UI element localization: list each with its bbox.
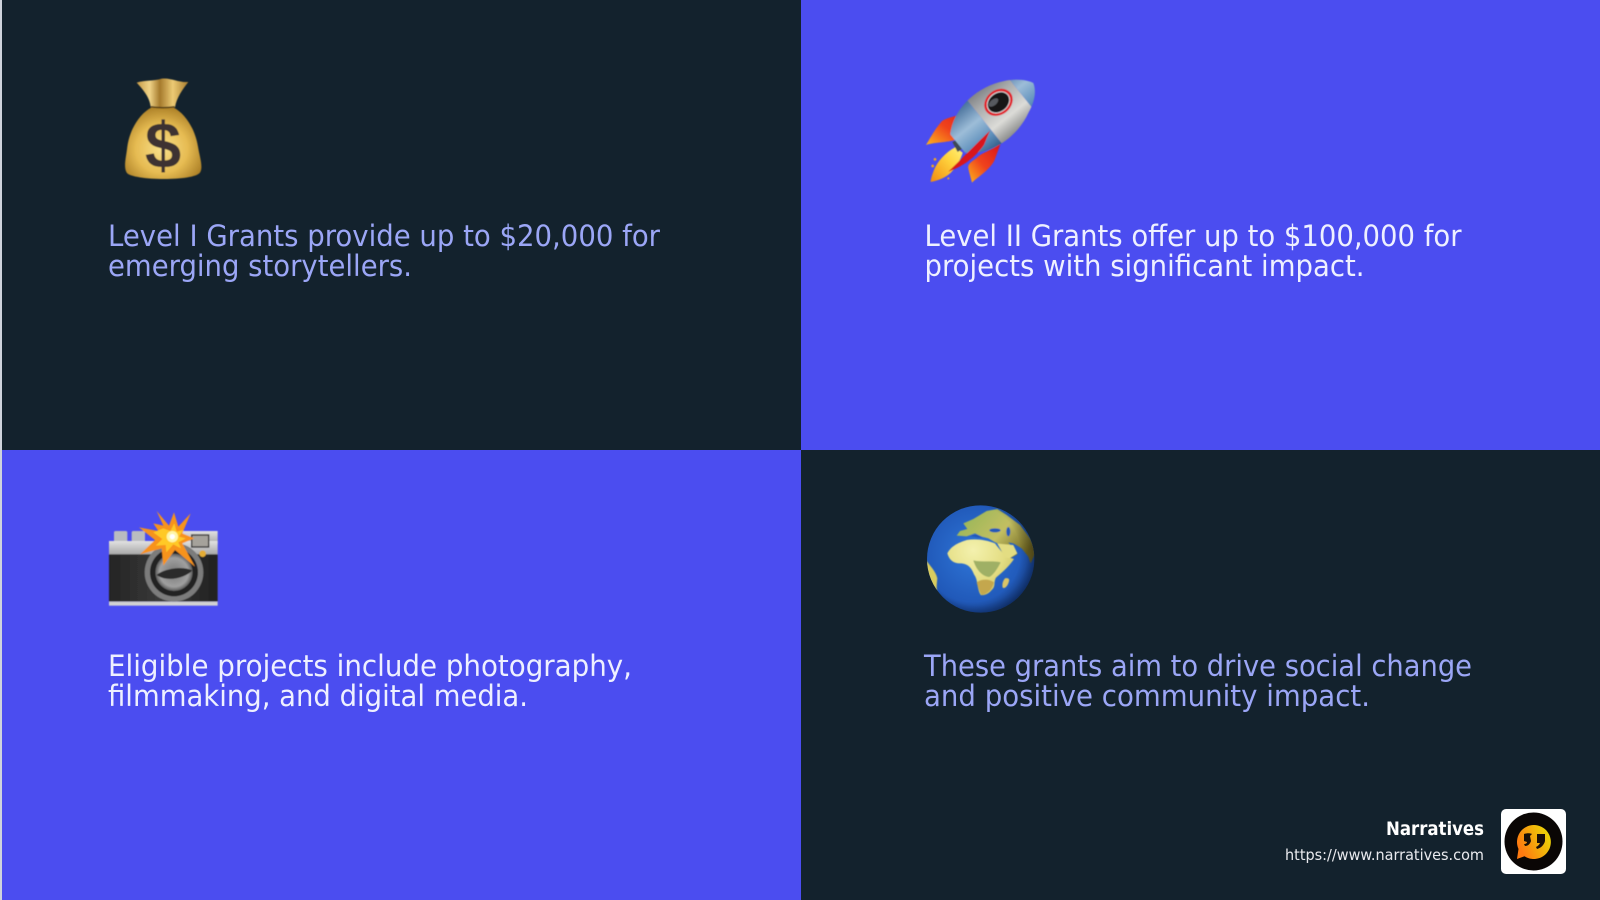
text: Level II: Level II Grants offer up to $100,000 for [924, 219, 1462, 253]
text: eligible: filmmaking, and digital media. [108, 679, 528, 713]
icon: rocket [926, 79, 1036, 183]
icon: money bag: $ [145, 108, 181, 181]
text: Level II: projects with significant impact. [924, 249, 1364, 283]
icon: narratives logo [1501, 809, 1566, 874]
text: social change: and positive community impact. [924, 679, 1370, 713]
text: eligible [108, 649, 632, 713]
text: Level I [108, 219, 661, 283]
text: eligible: Eligible projects include photography, [108, 649, 632, 683]
icon: globe [923, 505, 1036, 613]
brand url: https://www.narratives.com [1285, 846, 1484, 864]
panel: Level II grants [801, 0, 1600, 450]
text: social change [923, 649, 1472, 713]
text: Level I: emerging storytellers. [108, 249, 412, 283]
icon: money bag [125, 78, 201, 181]
panel: eligible projects [2, 450, 801, 900]
text: social change: These grants aim to drive social change [923, 649, 1472, 683]
brand footer [1285, 809, 1566, 874]
brand name: Narratives [1386, 818, 1484, 840]
text: Level I: Level I Grants provide up to $20,000 for [108, 219, 661, 253]
icon: camera with flash [109, 511, 218, 606]
panel: social change [924, 505, 1470, 712]
left edge strip [0, 0, 2, 900]
panel: Level I grants [2, 0, 801, 450]
text: Level II [924, 219, 1462, 283]
